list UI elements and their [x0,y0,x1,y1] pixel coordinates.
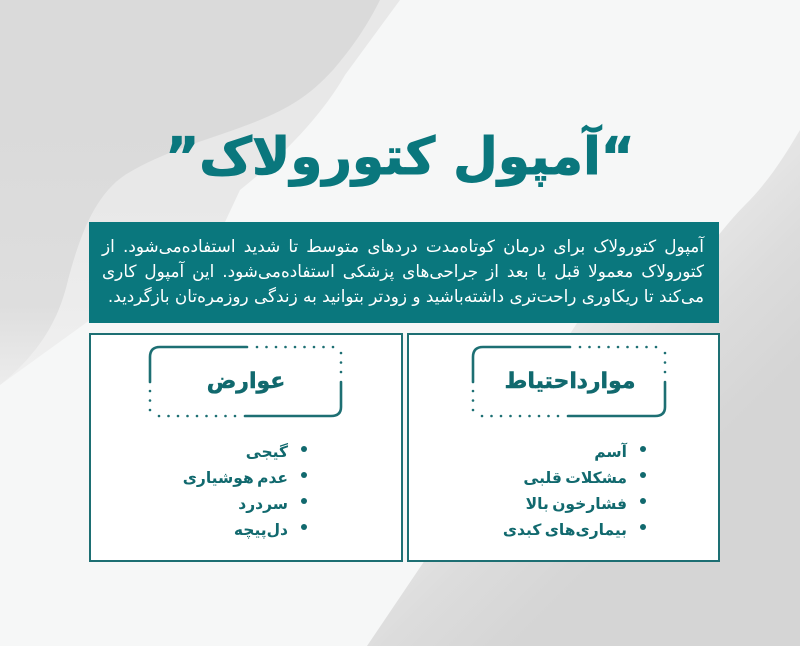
title: “آمپول کتورولاک” [165,127,635,187]
panel: introduction: می‌کند تا ریکاوری راحت‌تری داشته‌باشید و زودتر بتوانید به زندگی روزمره‌تان بازگردید. [108,286,704,306]
list: precautions: بیماری‌های کبدی [503,521,627,539]
list: side effects: دل‌پیچه [234,521,288,539]
icon: heading frame [472,346,666,418]
heading: precautions: موارد احتیاط [504,369,636,394]
list: side effects: عدم هوشیاری [183,469,288,487]
panel: introduction: کتورولاک معمولا قبل یا بعد از جراحی‌های پزشکی استفاده‌می‌شود. این آمپول کاری [102,261,704,281]
list: precautions: فشارخون بالا [526,495,627,513]
list: side effects: سردرد [238,495,288,513]
list: side effects: گیجی [246,443,288,461]
panel: introduction: آمپول کتورولاک برای درمان کوتاه‌مدت دردهای متوسط تا شدید استفاده‌می‌شود. از [102,236,704,256]
icon: heading frame [148,346,342,418]
panel: introduction [89,222,719,323]
list: precautions: مشکلات قلبی [523,469,627,487]
panel: side effects [89,333,403,562]
panel: precautions [407,333,720,562]
list: precautions [503,442,646,539]
list: precautions: آسم [594,443,627,461]
heading: side effects: عوارض [207,369,285,394]
list: side effects [183,442,307,539]
